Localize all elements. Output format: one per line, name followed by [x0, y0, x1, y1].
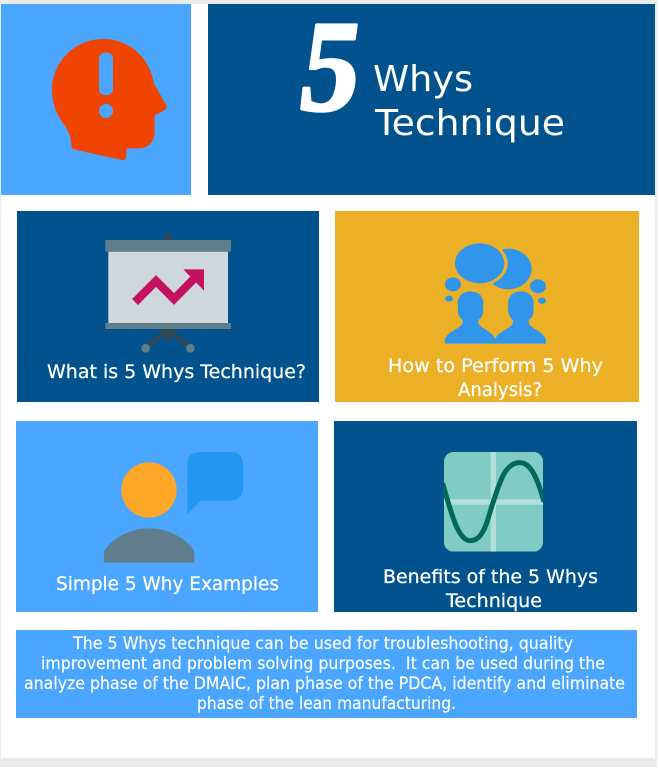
- text block: The 5 Whys technique can be used for troubleshooting, quality: [72, 634, 573, 653]
- label: [388, 355, 603, 401]
- icon: wave chart: [443, 452, 544, 552]
- text block: [24, 634, 625, 713]
- panel: simple examples: [16, 421, 318, 612]
- text block: improvement and problem solving purposes. It can be used during the: [41, 654, 605, 673]
- label: Benefits of the 5 Whys: [383, 566, 598, 588]
- icon: presentation board: [105, 234, 231, 353]
- label: Simple 5 Why Examples: [56, 573, 279, 595]
- text block: phase of the lean manufacturing.: [197, 694, 456, 713]
- panel: title banner: [208, 0, 655, 195]
- label: How to Perform 5 Why: [388, 355, 603, 377]
- icon: head with exclamation mark: [52, 39, 167, 160]
- panel: how to perform: [335, 211, 639, 402]
- icon: two people talking: [445, 241, 546, 344]
- panel: description: [16, 630, 637, 718]
- label: Technique: [445, 590, 542, 612]
- title: Technique: Technique: [374, 103, 565, 144]
- panel: benefits: [334, 421, 637, 612]
- label: What is 5 Whys Technique?: [47, 361, 306, 383]
- panel: what is 5 whys: [17, 211, 319, 402]
- icon: person with speech bubble: [104, 452, 243, 563]
- text block: analyze phase of the DMAIC, plan phase of the PDCA, identify and eliminate: [24, 674, 625, 693]
- label: Analysis?: [458, 379, 542, 401]
- panel: header icon: [1, 4, 191, 195]
- title: Whys: Whys: [373, 59, 473, 100]
- label: [383, 566, 598, 612]
